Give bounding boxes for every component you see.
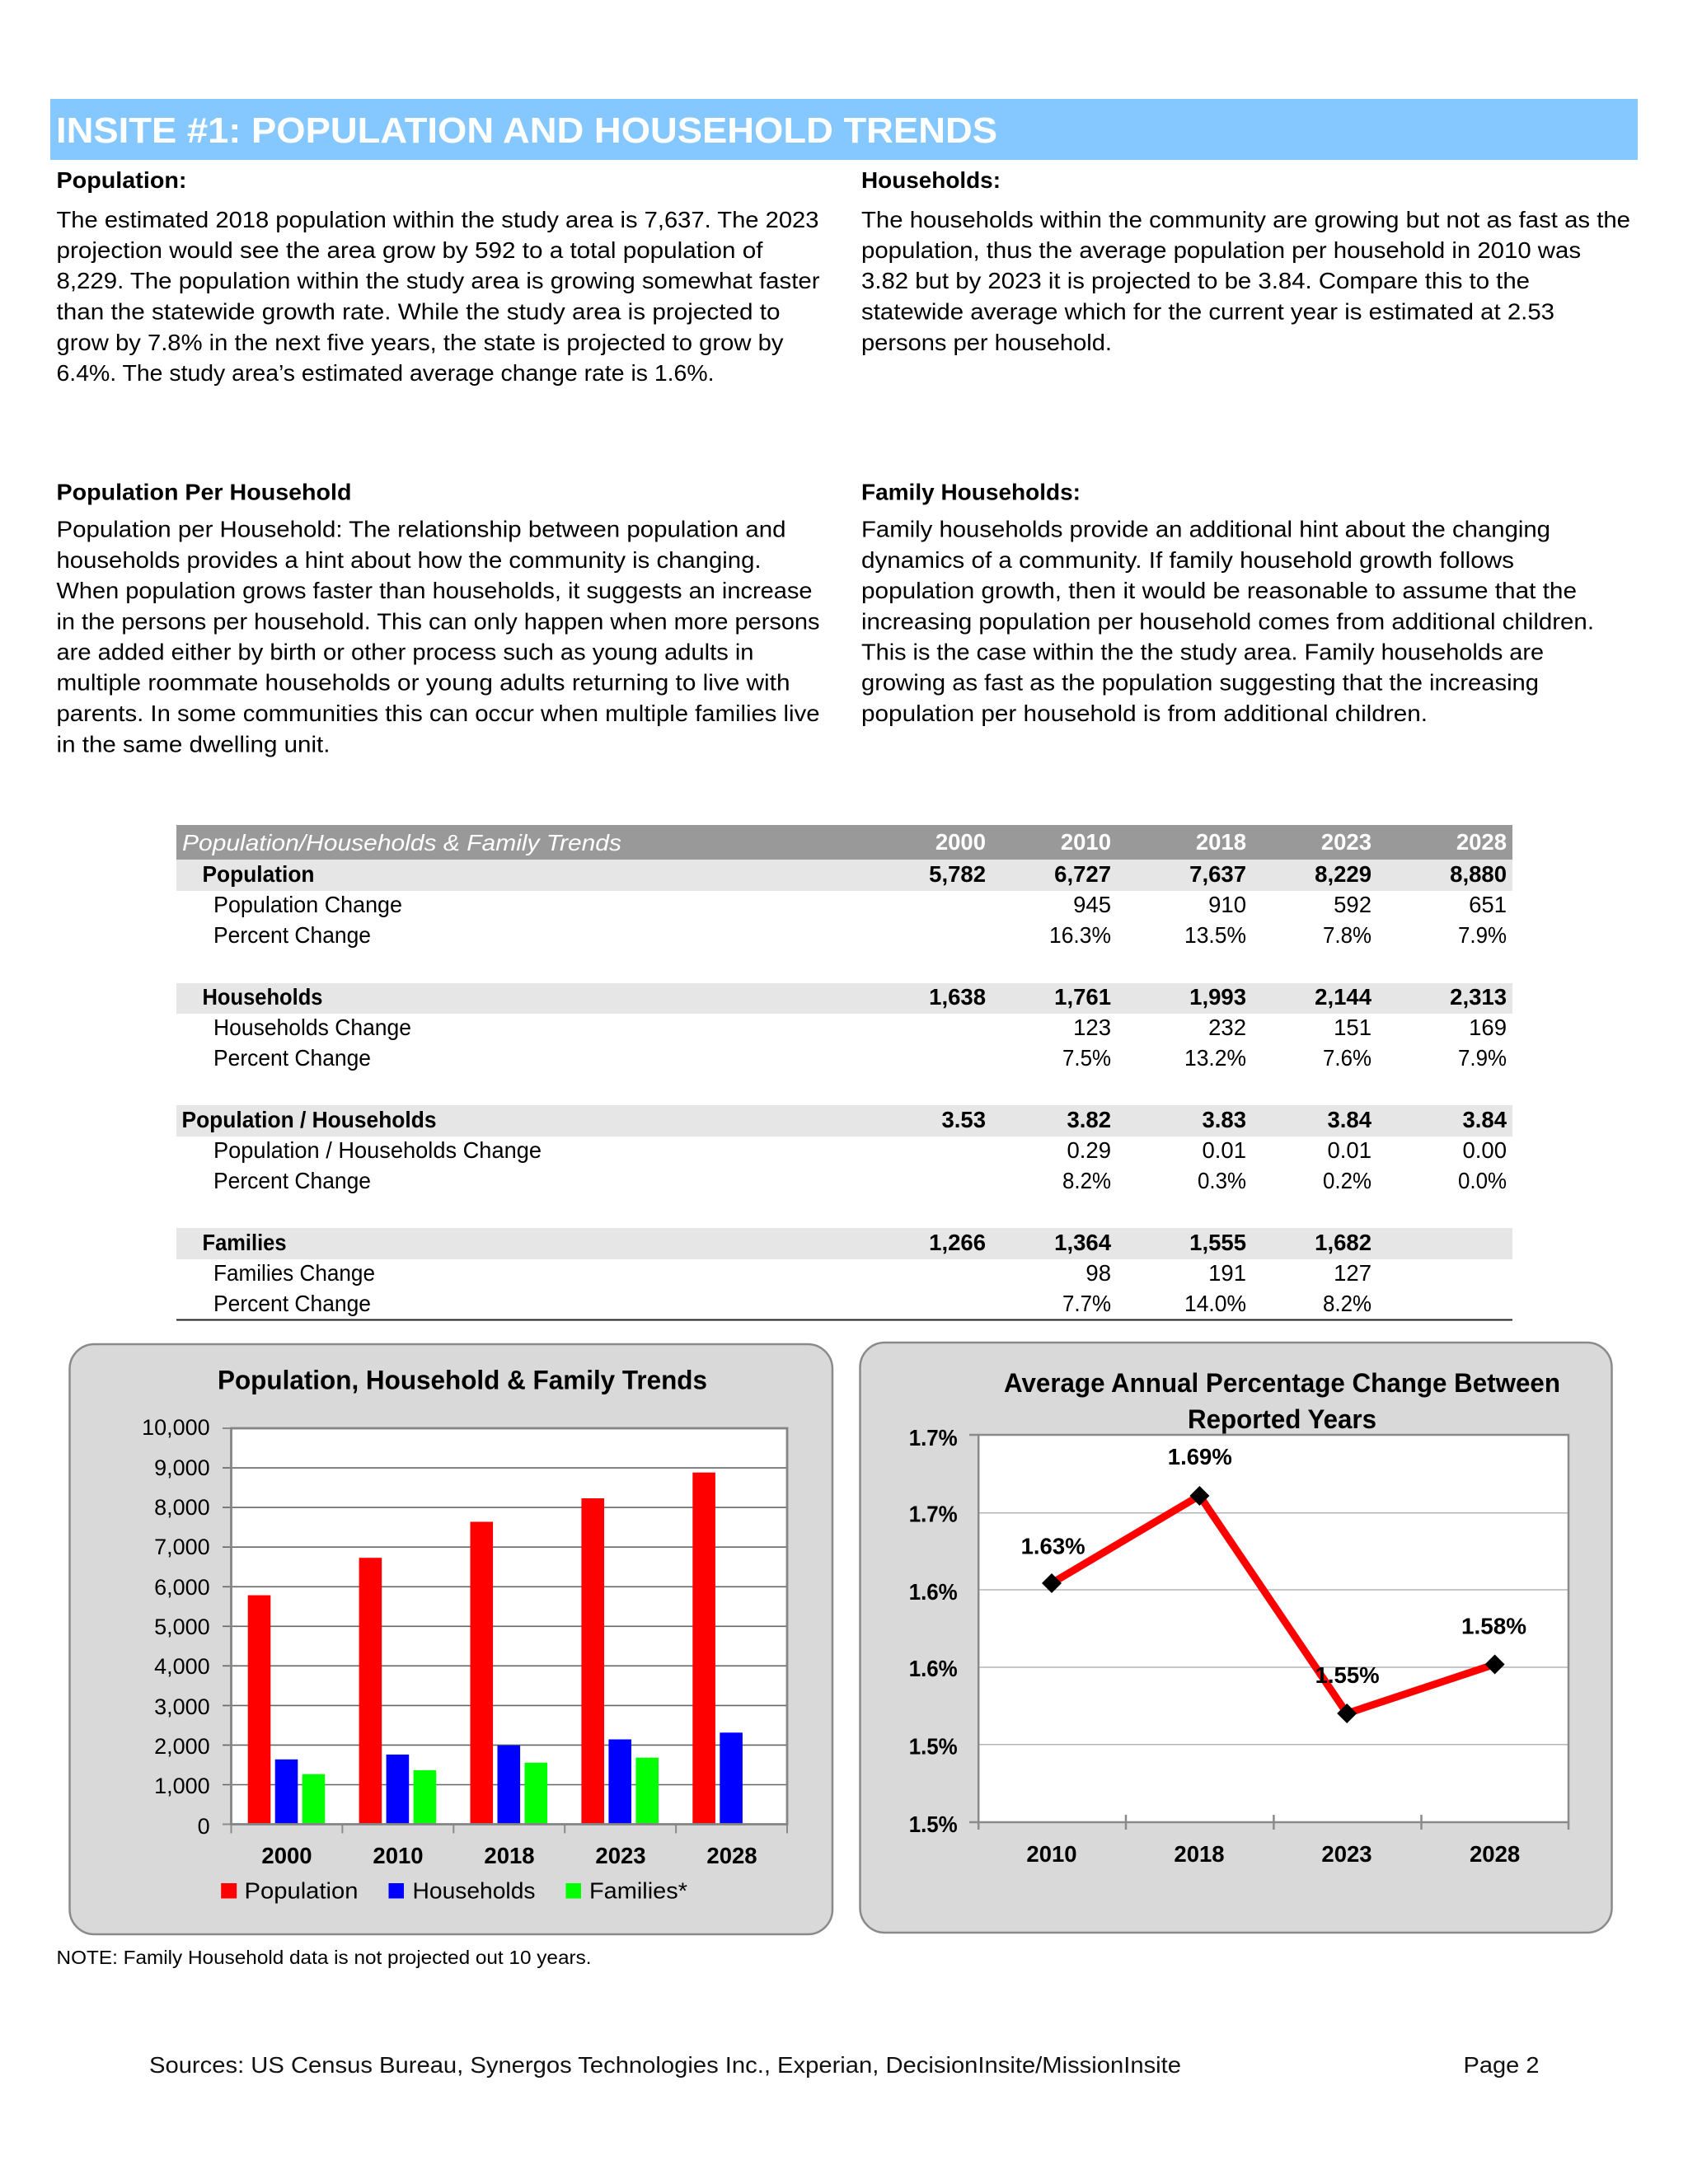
- table header row: 2018: [1196, 829, 1246, 855]
- text block: population per household: in the same dwelling unit.: [56, 732, 330, 757]
- legend: Households: [412, 1877, 536, 1904]
- families rows: 8.2%: [1323, 1291, 1372, 1316]
- y axis labels: 5,000: [154, 1615, 210, 1639]
- y axis labels: [909, 1425, 958, 1837]
- households rows: 13.2%: [1184, 1045, 1246, 1071]
- households rows: [176, 983, 1512, 1071]
- text block: population: projection would see the area grow by 592 to a total population of: [56, 237, 763, 263]
- population per household rows: 0.3%: [1198, 1168, 1246, 1193]
- plot frame: [231, 1428, 787, 1825]
- x axis labels: 2000: [261, 1843, 312, 1868]
- households rows: 2,313: [1450, 984, 1507, 1010]
- population rows: 945: [1073, 892, 1111, 917]
- population rows: 8,229: [1315, 861, 1372, 887]
- population per household rows: Population / Households: [181, 1107, 437, 1132]
- y axis labels: 6,000: [154, 1575, 210, 1600]
- families rows: Families Change: [213, 1260, 375, 1286]
- text block: population: 8,229. The population within the study area is growing somewhat faster: [56, 268, 819, 293]
- chart title: Reported Years: [1188, 1404, 1376, 1434]
- y axis labels: 7,000: [154, 1535, 210, 1559]
- population rows: Percent Change: [213, 922, 371, 948]
- population per household rows: 0.29: [1067, 1137, 1111, 1163]
- plot area with gridlines: [223, 1428, 787, 1833]
- population per household rows: [176, 1105, 1512, 1193]
- families rows: 1,555: [1189, 1230, 1246, 1255]
- text block: family households: [861, 480, 1594, 726]
- y axis labels: 1.5%: [909, 1734, 958, 1759]
- population per household rows: 0.00: [1462, 1137, 1507, 1163]
- text block: population: grow by 7.8% in the next five years, the state is projected to grow by: [56, 330, 784, 355]
- plot area with gridlines: [969, 1435, 1568, 1830]
- y axis labels: 3,000: [154, 1694, 210, 1719]
- households rows: 151: [1334, 1015, 1372, 1040]
- text block: population per household: households provides a hint about how the community is changing.: [56, 547, 761, 573]
- text block: population per household: [56, 480, 820, 757]
- population rows: 6,727: [1054, 861, 1111, 887]
- footer: sources: Sources: US Census Bureau, Synergos Technologies Inc., Experian, DecisionInsite/MissionInsite: [149, 2052, 1181, 2078]
- table header row: 2000: [935, 829, 986, 855]
- families rows: 1,364: [1054, 1230, 1112, 1255]
- population per household rows: 3.84: [1327, 1107, 1372, 1132]
- text block: households: The households within the community are growing but not as fast as the: [861, 207, 1630, 232]
- families bars: [302, 1758, 659, 1825]
- households bars: [275, 1732, 743, 1825]
- table header row: 2010: [1061, 829, 1111, 855]
- y axis labels: 8,000: [154, 1495, 210, 1520]
- x axis labels: 2028: [706, 1843, 757, 1868]
- text block: family households: population growth, then it would be reasonable to assume that the: [861, 578, 1577, 603]
- text block: population per household: Population Per Household: [56, 480, 351, 504]
- title banner: INSITE #1: POPULATION AND HOUSEHOLD TRENDS: [56, 110, 997, 151]
- legend: Population: [244, 1877, 358, 1904]
- x axis labels: 2023: [1321, 1841, 1372, 1867]
- data labels: [1021, 1444, 1526, 1688]
- text block: family households: Family Households:: [861, 480, 1081, 504]
- y axis labels: 10,000: [142, 1415, 210, 1440]
- y axis labels: 1,000: [154, 1774, 210, 1798]
- population rows: 13.5%: [1184, 922, 1246, 948]
- y axis labels: 1.6%: [909, 1579, 958, 1605]
- families rows: 7.7%: [1062, 1291, 1111, 1316]
- text block: population per household: in the persons per household. This can only happen when more persons: [56, 608, 820, 635]
- population rows: 7.8%: [1323, 922, 1372, 948]
- x axis labels: 2018: [1174, 1841, 1225, 1867]
- text block: family households: population per household is from additional children.: [861, 701, 1428, 726]
- families rows: 127: [1334, 1260, 1372, 1286]
- households rows: 1,638: [929, 984, 986, 1010]
- text block: population per household: multiple roommate households or young adults returning to live with: [56, 669, 790, 696]
- population per household rows: 3.83: [1202, 1107, 1246, 1132]
- families rows: [176, 1228, 1512, 1320]
- text block: households: statewide average which for the current year is estimated at 2.53: [861, 298, 1554, 325]
- text block: population: 6.4%. The study area’s estimated average change rate is 1.6%.: [56, 360, 715, 386]
- population per household rows: Percent Change: [213, 1168, 371, 1193]
- households rows: 169: [1469, 1015, 1507, 1040]
- data labels: 1.58%: [1461, 1614, 1526, 1638]
- x axis labels: 2028: [1470, 1841, 1520, 1867]
- population per household rows: 0.0%: [1458, 1168, 1507, 1193]
- households rows: 123: [1073, 1015, 1111, 1040]
- text block: family households: growing as fast as the population suggesting that the increasing: [861, 669, 1539, 696]
- population rows: [176, 860, 1512, 948]
- y axis labels: [142, 1415, 210, 1839]
- text block: family households: dynamics of a community. If family household growth follows: [861, 547, 1514, 573]
- population rows: 651: [1469, 892, 1507, 917]
- text block: population: than the statewide growth rate. While the study area is projected to: [56, 298, 780, 325]
- households rows: Households: [203, 984, 323, 1010]
- households rows: 7.9%: [1458, 1045, 1507, 1071]
- data line: [1052, 1496, 1495, 1713]
- text block: family households: Family households provide an additional hint about the changing: [861, 516, 1550, 542]
- text block: households: [861, 167, 1630, 355]
- population rows: Population: [203, 861, 315, 887]
- families rows: 14.0%: [1184, 1291, 1246, 1316]
- population per household rows: 8.2%: [1062, 1168, 1111, 1193]
- population rows: 8,880: [1450, 861, 1507, 887]
- data labels: 1.63%: [1021, 1533, 1085, 1559]
- population rows: 910: [1208, 892, 1246, 917]
- table header row: 2028: [1456, 829, 1507, 855]
- population rows: Population Change: [213, 892, 402, 917]
- text block: population per household: Population per Household: The relationship between population and: [56, 516, 786, 542]
- population per household rows: 0.2%: [1323, 1168, 1372, 1193]
- legend: [221, 1877, 687, 1904]
- y axis labels: 1.6%: [909, 1656, 958, 1681]
- data markers: [1042, 1486, 1505, 1723]
- families rows: 191: [1208, 1260, 1246, 1286]
- population per household rows: 0.01: [1327, 1137, 1372, 1163]
- population per household rows: 3.53: [941, 1107, 986, 1132]
- text block: households: 3.82 but by 2023 it is projected to be 3.84. Compare this to the: [861, 268, 1530, 293]
- x axis labels: [1026, 1841, 1520, 1867]
- population rows: 7,637: [1189, 861, 1246, 887]
- y axis labels: 1.7%: [909, 1425, 958, 1451]
- households rows: 7.6%: [1323, 1045, 1372, 1071]
- text block: population per household: parents. In some communities this can occur when multiple families live: [56, 701, 819, 726]
- table header row: [176, 825, 1512, 860]
- families rows: 1,682: [1315, 1230, 1372, 1255]
- text block: population: [56, 167, 819, 386]
- x axis labels: [261, 1843, 757, 1868]
- x axis labels: 2018: [484, 1843, 535, 1868]
- y axis labels: 2,000: [154, 1734, 210, 1759]
- families rows: Families: [203, 1230, 287, 1255]
- title banner: [50, 99, 1638, 160]
- table header row: Population/Households & Family Trends: [182, 830, 621, 855]
- chart title: [1004, 1368, 1560, 1434]
- text block: households: Households:: [861, 167, 1001, 193]
- households rows: 232: [1208, 1015, 1246, 1040]
- text block: family households: increasing population per household comes from additional children.: [861, 608, 1594, 635]
- panel: bar chart population, household and family trends: [69, 1344, 832, 1934]
- population rows: 7.9%: [1458, 922, 1507, 948]
- y axis labels: 1.7%: [909, 1502, 958, 1526]
- text block: population per household: are added either by birth or other process such as young adults in: [56, 640, 753, 664]
- population bars: [248, 1473, 715, 1825]
- x axis labels: 2010: [1026, 1841, 1077, 1867]
- population per household rows: 3.82: [1067, 1107, 1111, 1132]
- families rows: 1,266: [929, 1230, 986, 1255]
- chart title: Population, Household & Family Trends: [218, 1365, 707, 1394]
- y axis labels: 0: [198, 1814, 210, 1839]
- households rows: 1,993: [1189, 984, 1246, 1010]
- data labels: 1.69%: [1168, 1444, 1232, 1469]
- y axis labels: 9,000: [154, 1455, 210, 1480]
- data table: [176, 825, 1512, 1320]
- table header row: 2023: [1321, 829, 1372, 855]
- population rows: 5,782: [929, 861, 986, 887]
- families rows: 98: [1085, 1260, 1111, 1286]
- population per household rows: 0.01: [1202, 1137, 1246, 1163]
- x axis labels: 2023: [595, 1843, 646, 1868]
- population per household rows: Population / Households Change: [213, 1137, 542, 1163]
- text block: households: population, thus the average population per household in 2010 was: [861, 237, 1581, 263]
- text block: households: persons per household.: [861, 330, 1112, 355]
- households rows: Percent Change: [213, 1045, 371, 1071]
- y axis labels: 1.5%: [909, 1811, 958, 1837]
- text block: family households: This is the case within the the study area. Family households are: [861, 640, 1544, 664]
- text block: population: The estimated 2018 population within the study area is 7,637. The 2023: [56, 207, 818, 232]
- x axis labels: 2010: [373, 1843, 424, 1868]
- population rows: 16.3%: [1049, 922, 1111, 948]
- footer: page number: Page 2: [1464, 2052, 1540, 2078]
- note: NOTE: Family Household data is not projected out 10 years.: [56, 1947, 592, 1968]
- text block: population per household: When population grows faster than households, it suggests an increase: [56, 578, 813, 603]
- legend: Families*: [589, 1877, 687, 1904]
- population per household rows: 3.84: [1462, 1107, 1507, 1132]
- families rows: Percent Change: [213, 1291, 371, 1316]
- y axis labels: 4,000: [154, 1654, 210, 1679]
- households rows: 7.5%: [1062, 1045, 1111, 1071]
- population rows: 592: [1334, 892, 1372, 917]
- text block: population: Population:: [56, 167, 186, 193]
- chart title: Average Annual Percentage Change Between: [1004, 1368, 1560, 1398]
- households rows: Households Change: [213, 1015, 411, 1040]
- panel: line chart average annual percentage change: [860, 1343, 1612, 1933]
- data labels: 1.55%: [1315, 1662, 1380, 1688]
- households rows: 1,761: [1054, 984, 1111, 1010]
- households rows: 2,144: [1315, 984, 1372, 1010]
